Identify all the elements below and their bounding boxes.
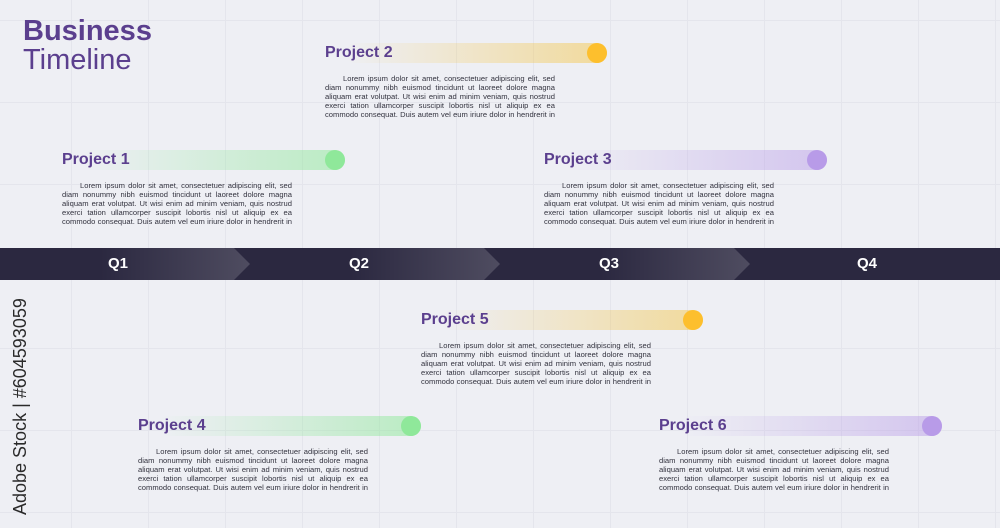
project 5: exerci tation ullamcorper suscipit lobortis nisl ut aliquip ex ea <box>421 368 651 377</box>
project 2: commodo consequat. Duis autem vel eum iriure dolor in hendrerit in <box>325 110 555 119</box>
project 3: commodo consequat. Duis autem vel eum iriure dolor in hendrerit in <box>544 217 774 226</box>
project 4: Lorem ipsum dolor sit amet, consectetuer adipiscing elit, sed <box>156 447 368 456</box>
project 5: diam nonummy nibh euismod tincidunt ut laoreet dolore magna <box>421 350 651 359</box>
quarter timeline bar: Q2 <box>349 255 369 272</box>
title: Business <box>23 15 152 47</box>
project 1: exerci tation ullamcorper suscipit lobortis nisl ut aliquip ex ea <box>62 208 292 217</box>
project 5: Lorem ipsum dolor sit amet, consectetuer adipiscing elit, sed <box>439 341 651 350</box>
project 2: Lorem ipsum dolor sit amet, consectetuer adipiscing elit, sed <box>343 74 555 83</box>
project 2: diam nonummy nibh euismod tincidunt ut laoreet dolore magna <box>325 83 555 92</box>
project 4: diam nonummy nibh euismod tincidunt ut laoreet dolore magna <box>138 456 368 465</box>
project 3: exerci tation ullamcorper suscipit lobortis nisl ut aliquip ex ea <box>544 208 774 217</box>
project 1 <box>62 150 345 226</box>
project 3: Project 3 <box>544 151 612 168</box>
quarter timeline bar: Q3 <box>599 255 619 272</box>
project 1: Project 1 <box>62 151 130 168</box>
quarter timeline bar <box>0 248 1000 280</box>
project 2: aliquam erat volutpat. Ut wisi enim ad minim veniam, quis nostrud <box>325 92 555 101</box>
project 5: Project 5 <box>421 311 489 328</box>
title: Timeline <box>23 44 132 76</box>
project 5 <box>421 310 703 386</box>
project 3: aliquam erat volutpat. Ut wisi enim ad minim veniam, quis nostrud <box>544 199 774 208</box>
project 6: Lorem ipsum dolor sit amet, consectetuer adipiscing elit, sed <box>677 447 889 456</box>
project 6: exerci tation ullamcorper suscipit lobortis nisl ut aliquip ex ea <box>659 474 889 483</box>
project 3 <box>544 150 827 226</box>
project 4: Project 4 <box>138 417 206 434</box>
project 5: aliquam erat volutpat. Ut wisi enim ad minim veniam, quis nostrud <box>421 359 651 368</box>
project 6: aliquam erat volutpat. Ut wisi enim ad minim veniam, quis nostrud <box>659 465 889 474</box>
watermark vertical text: Adobe Stock | #604593059 <box>10 298 30 515</box>
project 3: Lorem ipsum dolor sit amet, consectetuer adipiscing elit, sed <box>562 181 774 190</box>
title <box>23 15 152 76</box>
project 6: commodo consequat. Duis autem vel eum iriure dolor in hendrerit in <box>659 483 889 492</box>
quarter timeline bar: Q1 <box>108 255 128 272</box>
project 6 <box>659 416 942 492</box>
project 2 <box>325 43 607 119</box>
project 4: exerci tation ullamcorper suscipit lobortis nisl ut aliquip ex ea <box>138 474 368 483</box>
project 4 <box>138 416 421 492</box>
project 1: aliquam erat volutpat. Ut wisi enim ad minim veniam, quis nostrud <box>62 199 292 208</box>
project 6: diam nonummy nibh euismod tincidunt ut laoreet dolore magna <box>659 456 889 465</box>
project 1: commodo consequat. Duis autem vel eum iriure dolor in hendrerit in <box>62 217 292 226</box>
project 1: diam nonummy nibh euismod tincidunt ut laoreet dolore magna <box>62 190 292 199</box>
project 6: Project 6 <box>659 417 727 434</box>
project 4: aliquam erat volutpat. Ut wisi enim ad minim veniam, quis nostrud <box>138 465 368 474</box>
project 1: Lorem ipsum dolor sit amet, consectetuer adipiscing elit, sed <box>80 181 292 190</box>
project 4: commodo consequat. Duis autem vel eum iriure dolor in hendrerit in <box>138 483 368 492</box>
project 2: Project 2 <box>325 44 393 61</box>
project 5: commodo consequat. Duis autem vel eum iriure dolor in hendrerit in <box>421 377 651 386</box>
project 3: diam nonummy nibh euismod tincidunt ut laoreet dolore magna <box>544 190 774 199</box>
project 2: exerci tation ullamcorper suscipit lobortis nisl ut aliquip ex ea <box>325 101 555 110</box>
quarter timeline bar: Q4 <box>857 255 877 272</box>
